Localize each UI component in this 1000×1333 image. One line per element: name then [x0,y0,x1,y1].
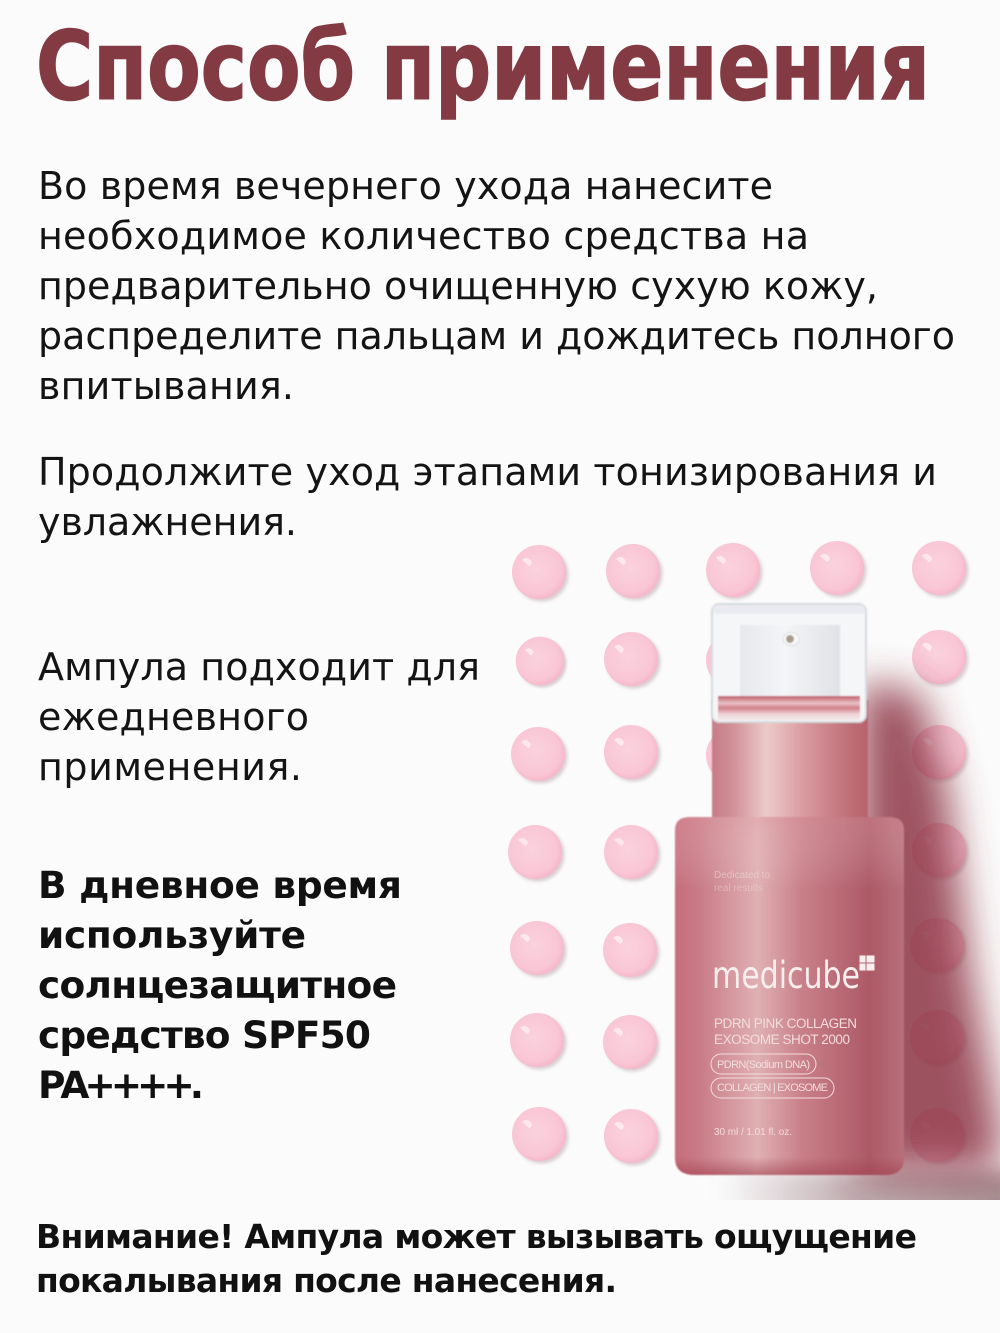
bottle label: real results [714,883,763,894]
text block: continue routine [38,450,937,544]
warning note: Внимание! Ампула может вызывать ощущение [36,1217,917,1256]
bottle label: PDRN PINK COLLAGEN [714,1016,857,1031]
text block: sunscreen advice: средство SPF50 [38,1013,371,1057]
bottle label: Dedicated to [714,870,771,881]
text block: evening routine [38,164,955,408]
warning note [36,1217,917,1300]
text block: continue routine: увлажнения. [38,500,297,544]
text block: evening routine: необходимое количество средства на [38,214,809,258]
text block: sunscreen advice: солнцезащитное [38,963,397,1007]
text block: continue routine: Продолжите уход этапами тонизирования и [38,450,937,494]
bottle label: COLLAGEN | EXOSOME [717,1082,828,1094]
bottle label: 30 ml / 1.01 fl. oz. [714,1127,792,1138]
text block: daily use: Ампула подходит для [38,645,480,689]
text block: daily use [38,645,480,789]
warning note: покалывания после нанесения. [36,1261,617,1300]
text block: sunscreen advice: В дневное время [38,863,402,907]
bottle label: medicube [712,954,860,997]
bottle body [675,817,904,1175]
bottle neck [712,700,868,820]
text block: evening routine: впитывания. [38,364,294,408]
text block: daily use: ежедневного [38,695,309,739]
text block: sunscreen advice: PA++++. [38,1063,204,1107]
text block: evening routine: Во время вечернего ухода нанесите [38,164,773,208]
icon: logo cross [859,955,875,971]
text block: evening routine: распределите пальцам и дождитесь полного [38,314,955,358]
bottle shadow [720,682,1000,1230]
text block: evening routine: предварительно очищенную сухую кожу, [38,264,878,308]
text block: sunscreen advice [38,863,402,1107]
drops of serum [508,541,968,1166]
bottle label [711,870,875,1138]
bottle label: PDRN(Sodium DNA) [717,1059,810,1071]
product photo with ampoule and drops [508,541,1000,1230]
title: Способ [36,12,355,122]
title [36,12,930,122]
bottle cap [712,604,866,722]
text block: sunscreen advice: используйте [38,913,306,957]
bottle label: EXOSOME SHOT 2000 [714,1032,850,1047]
text block: daily use: применения. [38,745,302,789]
